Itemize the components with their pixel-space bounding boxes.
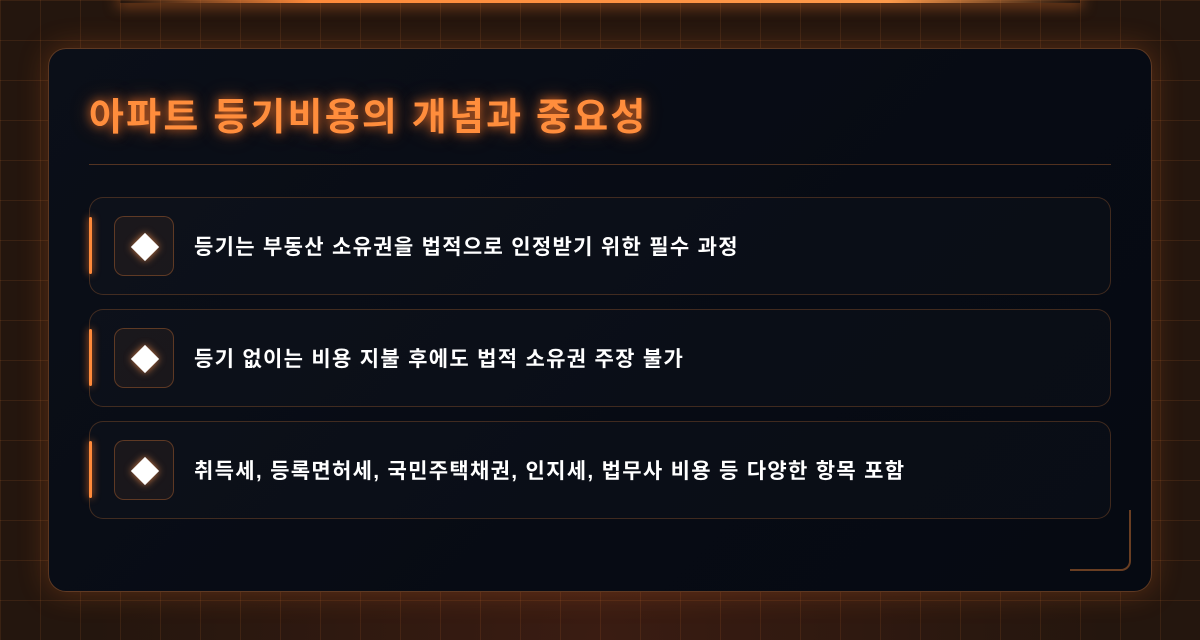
title: 아파트 등기비용의 개념과 중요성 (89, 97, 648, 139)
panel: main card (48, 48, 1152, 592)
item 2 (89, 309, 1111, 407)
icon: diamond (114, 216, 174, 276)
text 1: 등기는 부동산 소유권을 법적으로 인정받기 위한 필수 과정 (194, 236, 739, 259)
icon: diamond (114, 440, 174, 500)
item 3 (89, 421, 1111, 519)
item 1 (89, 197, 1111, 295)
icon: diamond (114, 328, 174, 388)
text 3: 취득세, 등록면허세, 국민주택채권, 인지세, 법무사 비용 등 다양한 항목 포함 (194, 460, 905, 483)
text 2: 등기 없이는 비용 지불 후에도 법적 소유권 주장 불가 (194, 348, 684, 371)
